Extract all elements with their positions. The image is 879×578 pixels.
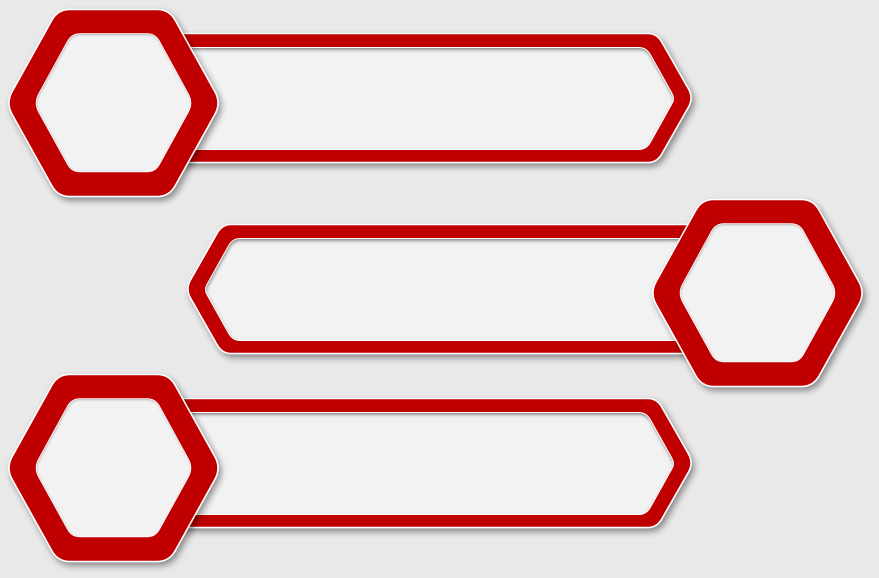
banner 3: bar	[170, 398, 691, 528]
banner 2: hexagon	[653, 200, 862, 386]
banner 1: hexagon	[9, 10, 218, 196]
banner 3: hexagon	[9, 374, 218, 562]
banner 2: bar	[188, 224, 709, 354]
banner 1: bar	[170, 34, 691, 162]
